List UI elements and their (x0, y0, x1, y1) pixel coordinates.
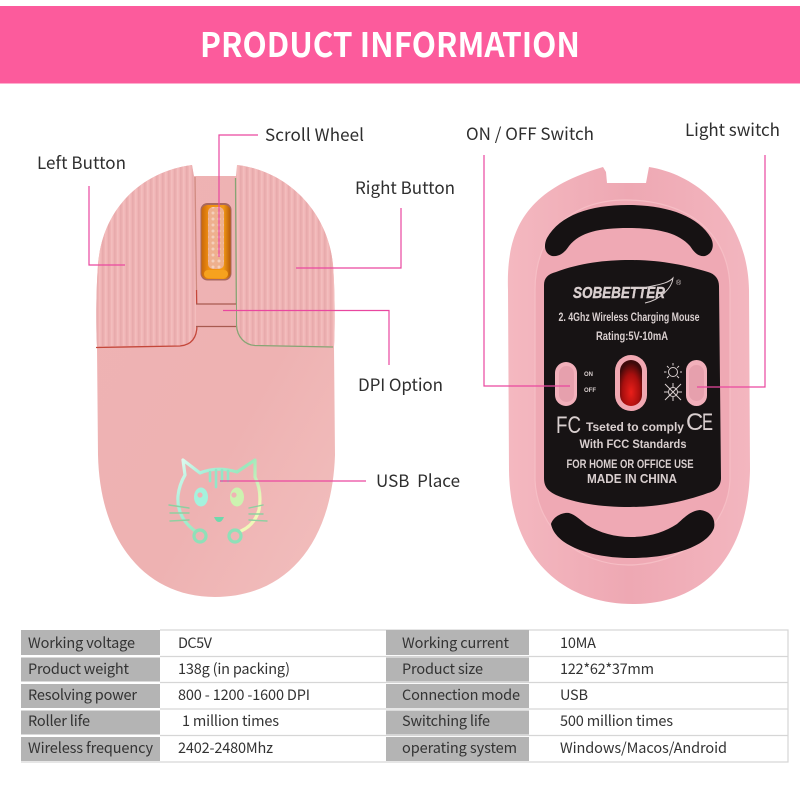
cat forehead stripes (210, 470, 228, 487)
on off switch (555, 362, 596, 406)
CE mark (686, 409, 713, 436)
row: product weight: Product size (402, 658, 483, 679)
power sensor (615, 355, 647, 411)
label: USB place: USB Place (376, 467, 460, 492)
compliance text 2: With FCC Standards (580, 437, 687, 451)
row: working voltage (28, 632, 596, 653)
label: left button: Left Button (37, 149, 126, 174)
leader: on off switch (484, 155, 570, 386)
row: roller life: Switching life (402, 710, 490, 731)
row: resolving power: Connection mode (402, 684, 520, 705)
row: working voltage: DC5V (178, 632, 213, 653)
on off switch: ON (584, 372, 593, 378)
label: light switch: Light switch (685, 116, 780, 141)
shell (508, 167, 750, 604)
rating text: Rating:5V-10mA (596, 329, 668, 343)
cat eyes (194, 488, 244, 506)
label: on off switch: ON / OFF Switch (466, 120, 594, 145)
inner outline (535, 200, 730, 565)
CE mark: E (702, 409, 713, 436)
title banner (0, 6, 800, 84)
label: right button: Right Button (355, 174, 455, 199)
on off switch: OFF (584, 388, 596, 394)
row: roller life: 1 million times (182, 710, 279, 731)
light switch (686, 360, 707, 406)
row: wireless frequency: Wireless frequency (28, 737, 153, 758)
leader: left button (89, 186, 125, 265)
cat logo (169, 460, 267, 542)
row: working voltage: Working voltage (28, 632, 135, 653)
row: wireless frequency: 2402-2480Mhz (178, 737, 273, 758)
product line text: 2. 4Ghz Wireless Charging Mouse (558, 312, 700, 324)
leader: scroll wheel (219, 135, 258, 257)
row: roller life: Roller life (28, 710, 90, 731)
row: wireless frequency: operating system (402, 737, 517, 758)
row: resolving power: USB (560, 684, 588, 705)
origin text: MADE IN CHINA (587, 472, 677, 486)
light icons (664, 363, 682, 401)
mouse top view (96, 165, 335, 597)
right label cells (386, 630, 529, 761)
CE mark: C (686, 409, 703, 436)
right button (237, 165, 335, 346)
cat whiskers (169, 505, 267, 521)
row: product weight: Product weight (28, 658, 130, 679)
brand logo: ® (676, 279, 682, 287)
leader: right button (296, 208, 401, 268)
row: product weight: 138g (in packing) (178, 658, 290, 679)
leader: DPI option (223, 310, 389, 365)
FC mark: FC (556, 412, 581, 439)
row: roller life (28, 710, 673, 731)
bottom foot pad (551, 510, 714, 558)
label: DPI option: DPI Option (358, 371, 443, 396)
left label cells (21, 630, 160, 761)
cat nose (214, 517, 224, 522)
brand logo (573, 278, 682, 303)
button glow seams (96, 177, 333, 348)
label: scroll wheel: Scroll Wheel (265, 121, 364, 146)
specification table (21, 630, 788, 762)
DPI button (196, 304, 236, 327)
leader: USB place (220, 480, 366, 482)
table frame (21, 630, 788, 762)
label plate (544, 260, 721, 507)
row: resolving power: Resolving power (28, 684, 137, 705)
row: product weight: 122*62*37mm (560, 658, 654, 679)
brand logo: SOBEBETTER (573, 285, 666, 302)
cat paw rings (194, 530, 241, 542)
row: product weight (28, 658, 654, 679)
title banner: PRODUCT INFORMATION (200, 18, 580, 67)
row: resolving power (28, 684, 588, 705)
leader: light switch (697, 155, 765, 387)
row: wireless frequency: Windows/Macos/Android (560, 737, 727, 758)
row: resolving power: 800 - 1200 -1600 DPI (178, 684, 310, 705)
row: roller life: 500 million times (560, 710, 673, 731)
scroll wheel (200, 203, 232, 280)
left button (96, 165, 197, 346)
row: working voltage: 10MA (560, 632, 596, 653)
top foot pad (545, 205, 713, 256)
row: wireless frequency (28, 737, 727, 758)
mouse underside (508, 167, 750, 604)
row: working voltage: Working current (402, 632, 510, 653)
compliance text 1: Tseted to comply (586, 422, 685, 434)
cat outline (178, 460, 260, 531)
usage text: FOR HOME OR OFFICE USE (566, 457, 694, 471)
mouse body (96, 165, 335, 597)
